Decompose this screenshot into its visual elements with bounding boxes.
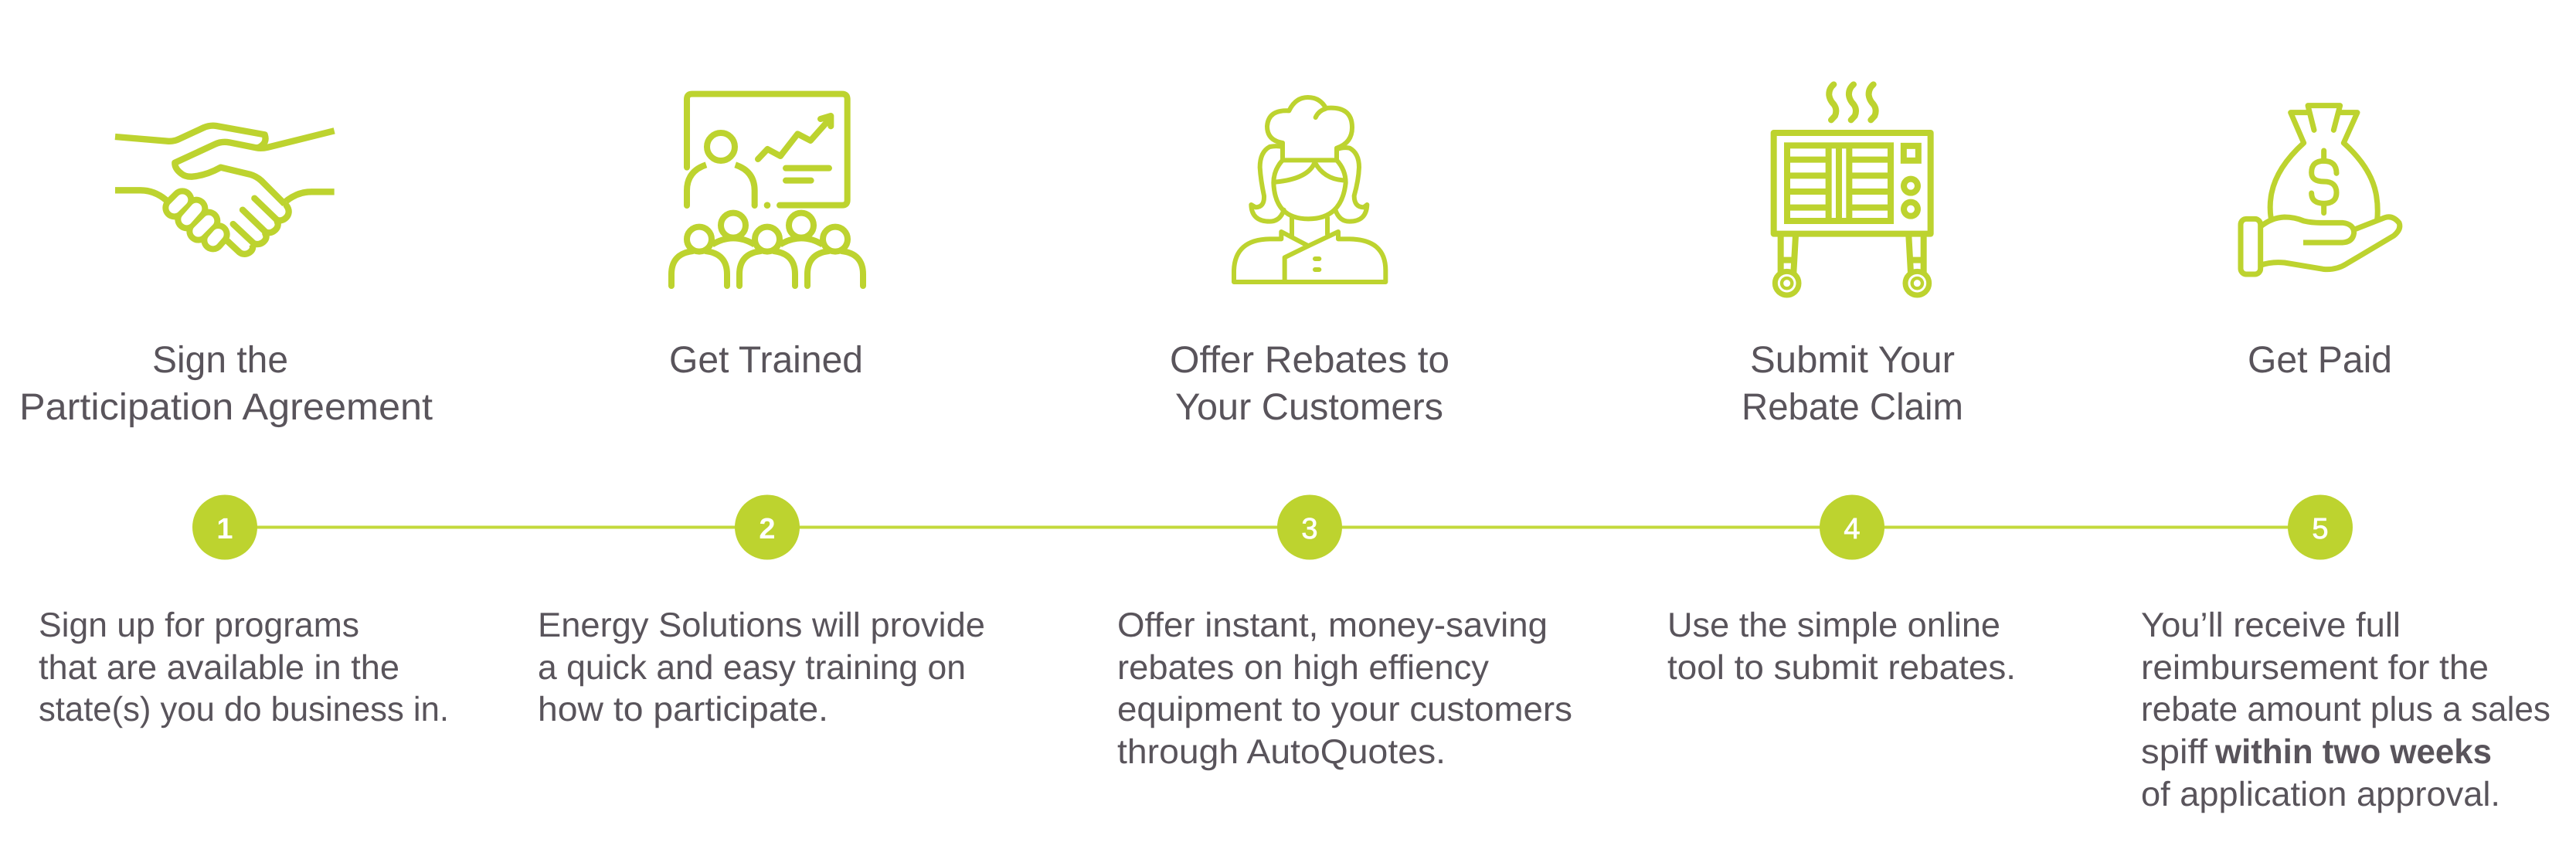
description: step 4: Use the simple online — [1667, 606, 2000, 644]
description: step 1: Sign up for programs — [39, 606, 359, 644]
heading: step 1 — [19, 339, 433, 428]
step marker 1: 1 — [216, 513, 233, 545]
heading: step 3: Your Customers — [1175, 386, 1443, 428]
description: step 1: state(s) you do business in. — [39, 691, 449, 728]
description: step 5: You’ll receive full — [2141, 606, 2401, 644]
description: step 3: Offer instant, money-saving — [1117, 606, 1548, 644]
heading: step 1: Sign the — [152, 339, 288, 381]
heading: step 3: Offer Rebates to — [1170, 339, 1449, 381]
description: step 5: within two weeks — [2214, 733, 2492, 771]
description: step 4 — [1667, 606, 2016, 687]
step marker 3 — [1277, 494, 1342, 559]
description: step 3: equipment to your customers — [1117, 691, 1572, 728]
description: step 5: spiff — [2141, 733, 2208, 771]
icon: trainer and audience — [671, 94, 863, 286]
description: step 2: Energy Solutions will provide — [538, 606, 985, 644]
description: step 3: through AutoQuotes. — [1117, 733, 1446, 771]
description: step 5 — [2141, 606, 2551, 813]
step marker 5 — [2288, 494, 2353, 559]
heading: step 1: Participation Agreement — [19, 386, 433, 428]
heading: step 4 — [1742, 339, 1963, 428]
step marker 2: 2 — [759, 513, 776, 545]
step marker 2 — [735, 494, 800, 559]
description: step 5: rebate amount plus a sales — [2141, 691, 2551, 728]
description: step 2: how to participate. — [538, 691, 828, 728]
description: step 5: reimbursement for the — [2141, 649, 2489, 687]
heading: step 4: Rebate Claim — [1742, 386, 1963, 428]
icon: convection oven — [1774, 84, 1931, 295]
description: step 3: rebates on high effiency — [1117, 649, 1490, 687]
icon: chef — [1234, 97, 1385, 282]
heading: step 5: Get Paid — [2248, 339, 2392, 381]
heading: step 3 — [1170, 339, 1449, 428]
description: step 2 — [538, 606, 985, 728]
description: step 2: a quick and easy training on — [538, 649, 966, 687]
description: step 5: of application approval. — [2141, 776, 2500, 813]
timeline connector — [225, 525, 2321, 528]
step marker 5: 5 — [2312, 513, 2329, 545]
step marker 3: 3 — [1301, 513, 1318, 545]
description: step 4: tool to submit rebates. — [1667, 649, 2016, 687]
step marker 4 — [1820, 494, 1884, 559]
heading: step 4: Submit Your — [1750, 339, 1955, 381]
description: step 3 — [1117, 606, 1572, 771]
description: step 1: that are available in the — [39, 649, 399, 687]
icon: handshake — [115, 126, 335, 254]
heading: step 2: Get Trained — [669, 339, 863, 381]
step marker 1 — [192, 494, 257, 559]
icon: hand holding money bag — [2241, 106, 2400, 274]
description: step 1 — [39, 606, 449, 728]
step marker 4: 4 — [1844, 513, 1861, 545]
